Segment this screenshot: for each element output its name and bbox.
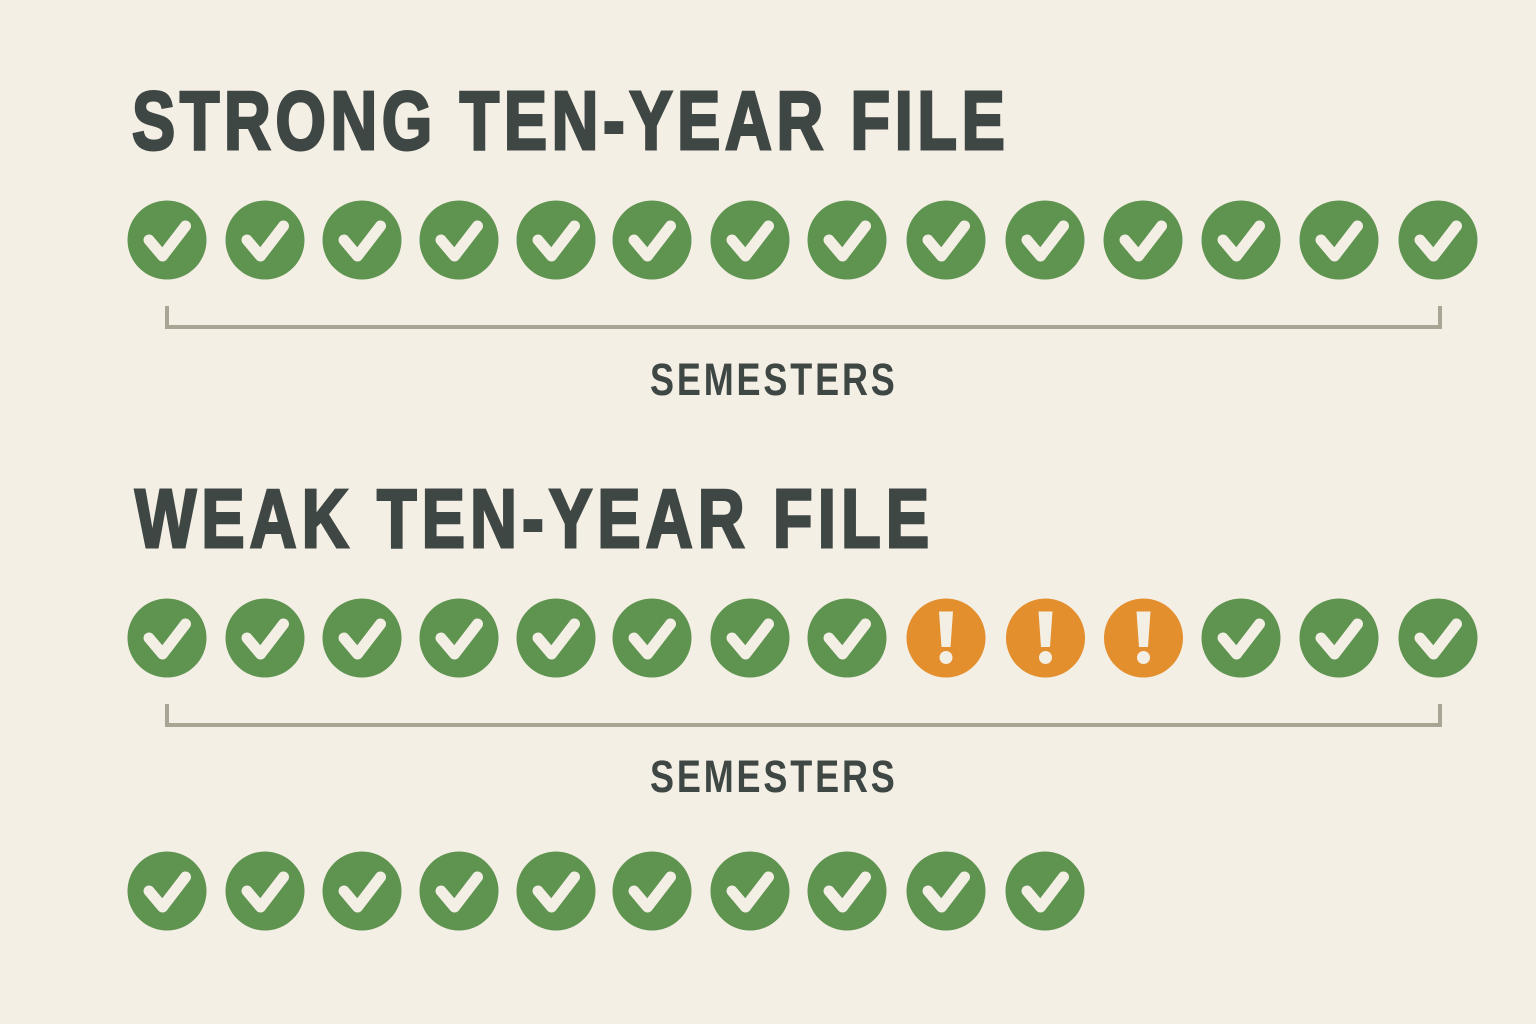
icon: check 6 xyxy=(612,598,692,678)
icon: check 5 xyxy=(516,852,596,930)
icon: check 3 xyxy=(322,852,402,930)
icon: check 1 xyxy=(128,598,206,678)
bracket: semesters span xyxy=(167,306,1440,327)
icon row: fourteen passed semesters xyxy=(128,200,1478,280)
icon: check 14 xyxy=(1398,598,1478,678)
heading: weak ten-year file: WEAK TEN-YEAR FILE xyxy=(135,472,929,565)
icon: check 9 xyxy=(906,852,986,930)
icon: check 10 xyxy=(1006,200,1084,280)
icon: check 5 xyxy=(516,200,596,280)
icon: check 3 xyxy=(322,598,402,678)
icon: check 13 xyxy=(1300,598,1378,678)
icon: check 7 xyxy=(710,598,790,678)
icon: check 8 xyxy=(808,852,886,930)
icon: check 7 xyxy=(710,852,790,930)
icon: check 12 xyxy=(1202,598,1280,678)
icon: check 2 xyxy=(226,200,304,280)
icon: check 6 xyxy=(612,200,692,280)
icon row: semesters with three warnings xyxy=(128,598,1478,678)
icon: check 8 xyxy=(808,598,886,678)
icon: check 10 xyxy=(1006,852,1084,930)
icon: warning 3 xyxy=(1104,598,1183,678)
icon row: ten additional passed semesters xyxy=(128,852,1084,930)
icon: check 6 xyxy=(612,852,692,930)
icon: check 11 xyxy=(1104,200,1182,280)
icon: check 7 xyxy=(710,200,790,280)
icon: check 2 xyxy=(226,598,304,678)
label: semesters: SEMESTERS xyxy=(650,751,895,802)
icon: check 4 xyxy=(420,598,498,678)
icon: check 12 xyxy=(1202,200,1280,280)
icon: check 13 xyxy=(1300,200,1378,280)
icon: check 4 xyxy=(420,852,498,930)
panel: weak ten-year file xyxy=(128,472,1478,802)
panel: strong ten-year file xyxy=(128,74,1478,405)
icon: warning 1 xyxy=(906,598,986,678)
icon: check 2 xyxy=(226,852,304,930)
label: semesters: SEMESTERS xyxy=(650,354,895,405)
bracket: semesters span xyxy=(167,704,1440,725)
icon: check 14 xyxy=(1398,200,1478,280)
icon: check 8 xyxy=(808,200,886,280)
icon: check 1 xyxy=(128,200,206,280)
icon: check 1 xyxy=(128,852,206,930)
icon: check 5 xyxy=(516,598,596,678)
icon: check 4 xyxy=(420,200,498,280)
heading: strong ten-year file: STRONG TEN-YEAR FILE xyxy=(132,74,1005,167)
icon: check 3 xyxy=(322,200,402,280)
icon: warning 2 xyxy=(1006,598,1085,678)
icon: check 9 xyxy=(906,200,986,280)
